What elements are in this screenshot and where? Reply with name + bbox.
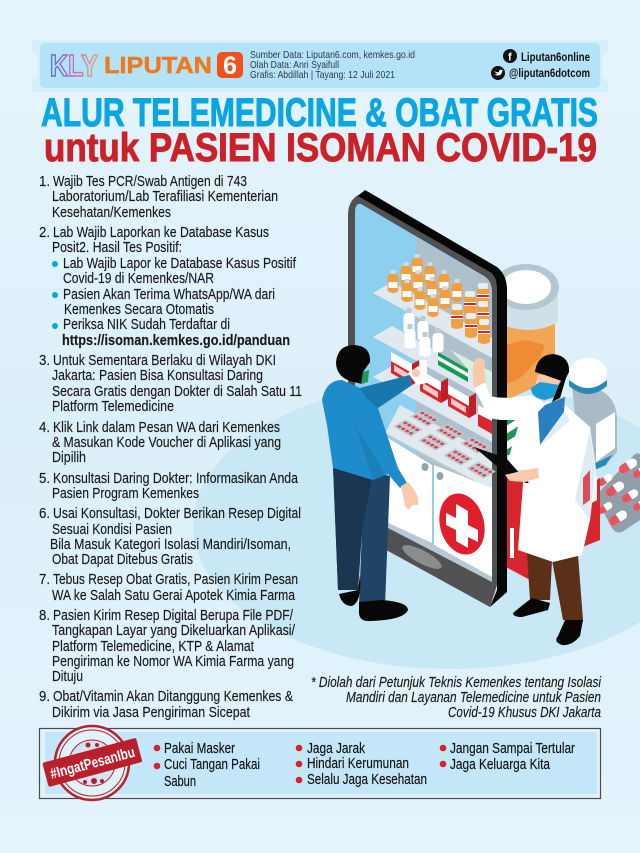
step 2 <box>39 225 297 349</box>
orange vials <box>388 254 490 344</box>
step 1: Wajib Tes PCR/Swab Antigen di 743 <box>53 174 247 190</box>
column 2: Hindari Kerumunan <box>307 756 409 772</box>
column 3: Jangan Sampai Tertular <box>450 741 575 757</box>
step 2: 2. <box>39 225 50 241</box>
step 9: 9. <box>39 689 50 705</box>
icon: capsule blister pack <box>596 453 640 532</box>
step 3: Platform Telemedicine <box>52 399 174 415</box>
step 5: 5. <box>39 471 50 487</box>
panel: reminders <box>40 726 600 800</box>
title <box>41 91 598 170</box>
source note: Covid-19 Khusus DKI Jakarta <box>448 705 601 721</box>
step 8 <box>39 608 296 685</box>
step 6: Usai Konsultasi, Dokter Berikan Resep Digital <box>53 506 301 522</box>
step 2: Kemenkes Secara Otomatis <box>64 302 214 318</box>
step 3: 3. <box>39 353 50 369</box>
step 9 <box>39 689 293 721</box>
illustration: pharmacy phone with patient and doctor <box>193 190 640 669</box>
column 1: Pakai Masker <box>164 741 235 757</box>
step 7: WA ke Salah Satu Gerai Apotek Kimia Farma <box>52 588 296 604</box>
icon: small white bottle <box>569 358 617 472</box>
step 8: Dituju <box>52 669 83 685</box>
source credits: Grafis: Abdillah | Tayang: 12 Juli 2021 <box>250 69 395 81</box>
logo: KLY Liputan6: 6 <box>223 52 237 80</box>
step 8: 8. <box>39 608 50 624</box>
step 6: Bila Masuk Kategori Isolasi Mandiri/Isoman, <box>50 537 291 553</box>
cabinet doors with red cross <box>385 433 492 582</box>
column 1 <box>154 741 260 790</box>
step 8: Tangkapan Layar yang Dikeluarkan Aplikasi/ <box>52 623 296 639</box>
stamp: #IngatPesanIbu: #IngatPesanIbu <box>48 744 137 783</box>
column 2: Selalu Jaga Kesehatan <box>307 772 427 788</box>
step 2: Periksa NIK Sudah Terdaftar di <box>63 317 230 333</box>
step 2: Lab Wajib Laporkan ke Database Kasus <box>53 225 269 241</box>
step 6: 6. <box>39 506 50 522</box>
step 5: Pasien Program Kemenkes <box>52 486 199 502</box>
source note <box>311 675 602 721</box>
column 3 <box>440 741 575 773</box>
step 7 <box>39 572 298 604</box>
logo: KLY Liputan6: LIPUTAN <box>104 52 212 78</box>
step 8: Pasien Kirim Resep Digital Berupa File PDF/ <box>53 608 294 624</box>
social handles: @liputan6dotcom <box>509 68 590 80</box>
step 1 <box>39 174 278 221</box>
step 2: https://isoman.kemkes.go.id/panduan <box>62 333 290 349</box>
step 4: Klik Link dalam Pesan WA dari Kemenkes <box>53 420 280 436</box>
stamp: #IngatPesanIbu <box>42 726 142 800</box>
step 1: Laboratorium/Lab Terafiliasi Kementerian <box>52 189 278 205</box>
column 3: Jaga Keluarga Kita <box>450 757 551 773</box>
step 6: Obat Dapat Ditebus Gratis <box>52 552 193 568</box>
step 8: Pengiriman ke Nomor WA Kimia Farma yang <box>52 654 294 670</box>
step 3 <box>39 353 302 415</box>
boxed medicine on shelf <box>391 350 492 434</box>
step 2: Lab Wajib Lapor ke Database Kasus Positif <box>63 256 297 272</box>
step 7: Tebus Resep Obat Gratis, Pasien Kirim Pesan <box>53 572 298 588</box>
logo: KLY Liputan6 <box>50 48 243 83</box>
step 4: 4. <box>39 420 50 436</box>
step 9: Obat/Vitamin Akan Ditanggung Kemenkes & <box>53 689 293 705</box>
column 2 <box>296 741 427 788</box>
shelves <box>373 282 492 490</box>
step 4: & Masukan Kode Voucher di Aplikasi yang <box>52 435 281 451</box>
step 8: Platform Telemedicine, KTP & Alamat <box>52 639 254 655</box>
step 4 <box>39 420 281 466</box>
logo: KLY Liputan6: KLY <box>50 48 98 83</box>
red and green medicine boxes behind doctor <box>506 415 600 580</box>
step 1: 1. <box>39 174 50 190</box>
column 1: Cuci Tangan Pakai <box>164 757 260 773</box>
social handles <box>491 49 590 80</box>
step 7: 7. <box>39 572 50 588</box>
column 2: Jaga Jarak <box>307 741 366 757</box>
patient <box>322 345 427 621</box>
source credits: Sumber Data: Liputan6.com, kemkes.go.id <box>250 49 415 61</box>
white vials <box>404 308 444 356</box>
steps list <box>39 174 302 721</box>
source credits: Olah Data: Anri Syaifull <box>250 59 339 71</box>
phone body <box>348 190 507 607</box>
header banner <box>32 40 608 92</box>
step 5 <box>39 471 299 502</box>
step 2: Pasien Akan Terima WhatsApp/WA dari <box>63 287 275 303</box>
column 1: Sabun <box>164 774 196 790</box>
pill blisters on counter <box>393 410 496 478</box>
step 1: Kesehatan/Kemenkes <box>52 205 171 221</box>
icon: large orange medicine bottle <box>493 264 559 402</box>
step 4: Dipilih <box>52 450 86 466</box>
source credits <box>250 49 415 81</box>
step 2: Posit2. Hasil Tes Positif: <box>52 240 182 256</box>
step 3: Untuk Sementara Berlaku di Wilayah DKI <box>53 353 276 369</box>
social handles: Liputan6online <box>521 52 590 64</box>
social handles: f <box>508 52 512 64</box>
step 3: Jakarta: Pasien Bisa Konsultasi Daring <box>52 368 263 384</box>
step 9: Dikirim via Jasa Pengiriman Sicepat <box>52 705 250 721</box>
doctor <box>473 354 596 645</box>
step 5: Konsultasi Daring Dokter: Informasikan Anda <box>53 471 299 487</box>
step 2: Covid-19 di Kemenkes/NAR <box>63 271 214 287</box>
step 3: Secara Gratis dengan Dokter di Salah Satu 11 <box>52 384 302 400</box>
step 6: Sesuai Kondisi Pasien <box>52 522 172 538</box>
step 6 <box>39 506 301 568</box>
